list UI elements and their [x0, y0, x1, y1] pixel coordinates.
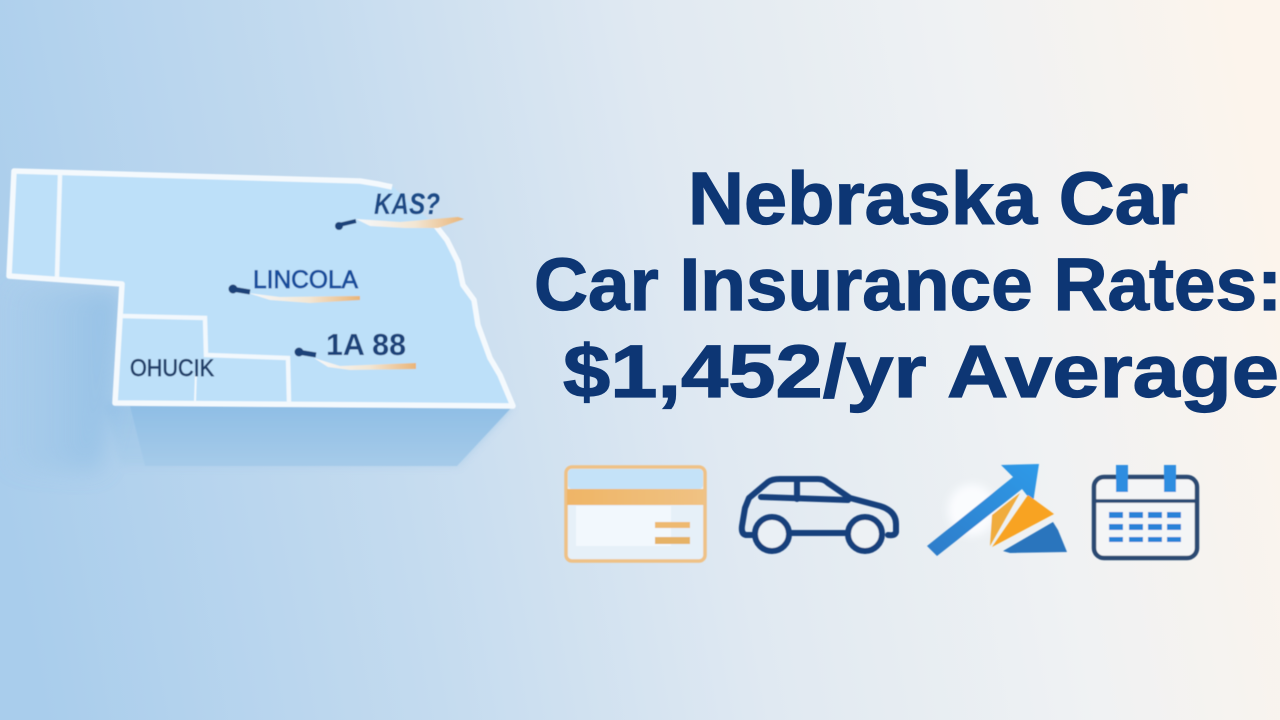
label: OHUCIK: OHUCIK: [130, 355, 214, 382]
label: 1A 88: 1A 88: [326, 327, 406, 362]
map shadow: [0, 285, 513, 470]
title line 1: Nebraska Car: [688, 157, 1188, 240]
icon: calendar: [1094, 465, 1197, 558]
map of Nebraska: [0, 171, 513, 470]
label: 1A 88: [294, 327, 416, 370]
state shape: [9, 171, 513, 406]
title: [534, 157, 1280, 413]
county lines: [57, 175, 289, 403]
icon: credit card: [566, 467, 705, 561]
icon: growth arrow with pie: [927, 464, 1067, 556]
title line 3: $1,452/yr Average: [563, 330, 1279, 413]
label: LINCOLA: [228, 266, 360, 303]
label: LINCOLA: LINCOLA: [253, 266, 358, 294]
label: KAS?: [335, 188, 464, 230]
title line 2: Car Insurance Rates:: [534, 243, 1280, 326]
state border: [9, 171, 513, 406]
label: KAS?: KAS?: [374, 188, 440, 221]
icon: car: [742, 479, 896, 551]
